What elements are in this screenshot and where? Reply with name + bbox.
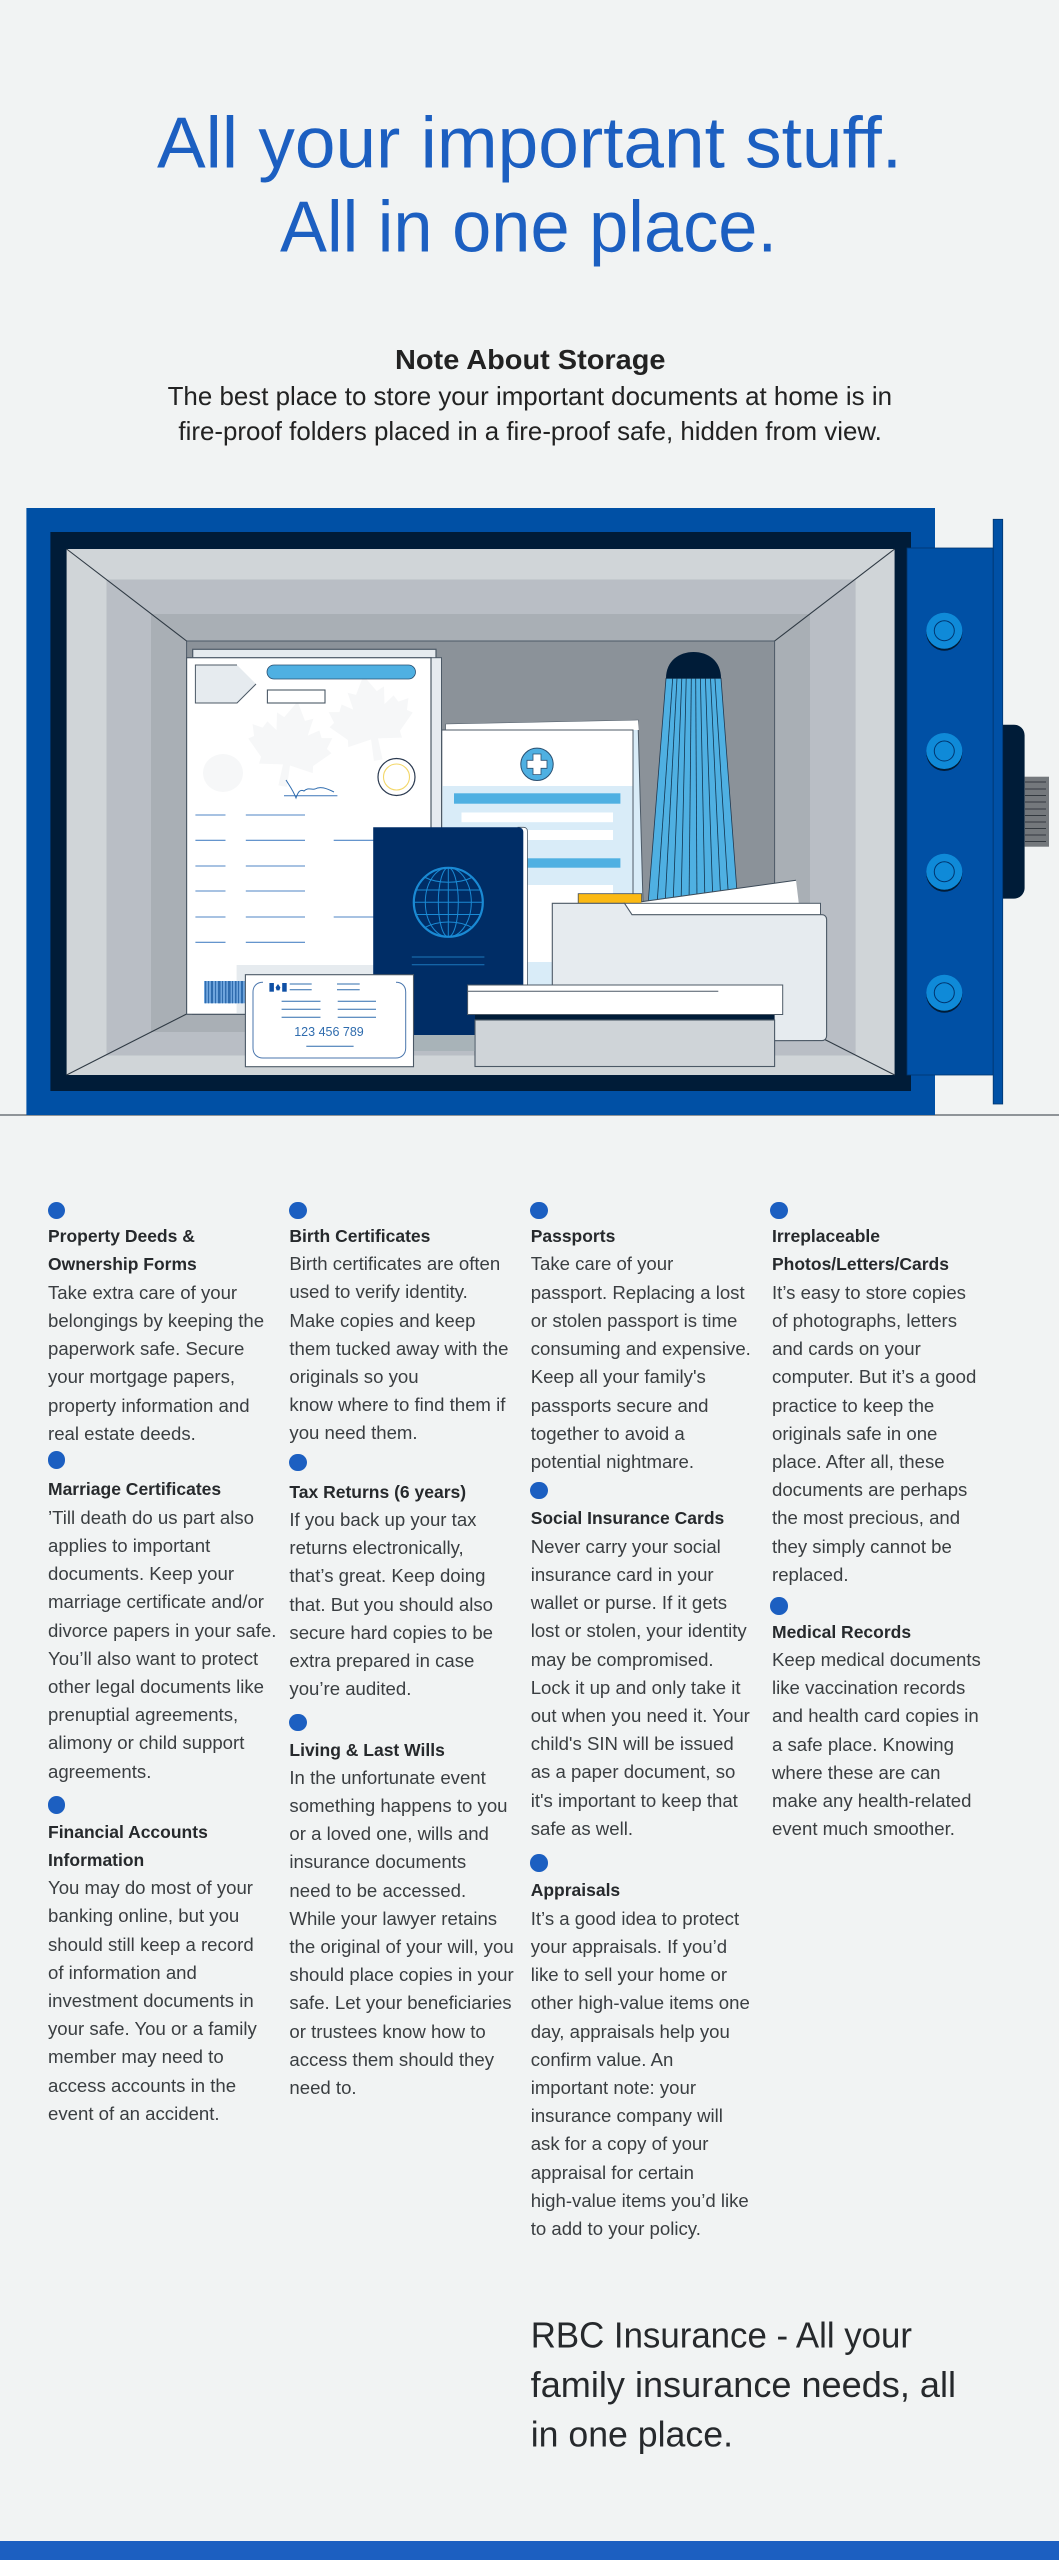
passport — [373, 827, 527, 1035]
body text: If you back up your tax — [289, 1509, 476, 1530]
body text: Take care of your — [531, 1253, 673, 1274]
body text: Take extra care of your — [48, 1282, 237, 1303]
panel: birth certificates — [289, 1202, 508, 1443]
body text: used to verify identity. — [289, 1281, 468, 1302]
document lines — [195, 815, 374, 942]
body text: them tucked away with the — [289, 1338, 508, 1359]
safe illustration — [0, 508, 1059, 1116]
body text: investment documents in — [48, 1990, 254, 2011]
body text: belongings by keeping the — [48, 1310, 264, 1331]
body text: practice to keep the — [772, 1394, 934, 1416]
body text: that. But you should also — [289, 1594, 493, 1615]
body text: safe. Let your beneficiaries — [289, 1992, 512, 2013]
heading — [48, 1822, 208, 1870]
bullet — [48, 1796, 65, 1814]
heading: Irreplaceable — [772, 1226, 880, 1246]
body text: your appraisals. If you’d — [531, 1936, 727, 1957]
closing statement: RBC Insurance - All your — [531, 2315, 912, 2356]
rolled document — [648, 652, 738, 905]
body text: Never carry your social — [531, 1536, 721, 1557]
body text: where these are can — [772, 1762, 940, 1783]
body text: should still keep a record — [48, 1934, 254, 1955]
storage note — [168, 344, 892, 446]
heading: Living & Last Wills — [289, 1740, 445, 1760]
body text: passport. Replacing a lost — [531, 1282, 745, 1303]
body text: member may need to — [48, 2046, 224, 2067]
barcode — [204, 981, 245, 1003]
body text — [531, 1253, 751, 1472]
body text: that’s great. Keep doing — [289, 1565, 485, 1586]
body text: lost or stolen, your identity — [531, 1620, 747, 1641]
title: All in one place. — [280, 188, 777, 268]
panel: social insurance cards — [530, 1482, 750, 1839]
body text: your safe. You or a family — [48, 2018, 257, 2039]
body text: together to avoid a — [531, 1423, 685, 1444]
body text: Birth certificates are often — [289, 1253, 500, 1274]
body text: originals so you — [289, 1366, 419, 1387]
title — [157, 103, 902, 268]
title bar — [267, 665, 416, 679]
body text — [48, 1507, 276, 1782]
heading: Information — [48, 1850, 144, 1870]
body text: consuming and expensive. — [531, 1338, 751, 1359]
bullet — [770, 1597, 788, 1615]
body text: property information and — [48, 1394, 250, 1416]
heading: Social Insurance Cards — [531, 1508, 724, 1528]
heading: Ownership Forms — [48, 1254, 197, 1274]
bullet — [530, 1202, 548, 1219]
medical document — [442, 720, 643, 985]
body text — [530, 1536, 750, 1839]
body text: and health card copies in — [772, 1705, 979, 1726]
heading — [48, 1226, 197, 1274]
panel: appraisals — [530, 1854, 750, 2239]
body text: documents are perhaps — [772, 1479, 967, 1500]
panel: marriage certificates — [48, 1451, 276, 1782]
safe interior — [67, 549, 895, 1075]
body text — [289, 1767, 514, 2098]
note text: The best place to store your important documents at home is in — [168, 381, 892, 411]
note text: fire-proof folders placed in a fire-proof safe, hidden from view. — [178, 416, 882, 446]
body text: event much smoother. — [772, 1818, 955, 1839]
globe emblem — [414, 868, 483, 937]
bullet — [770, 1202, 788, 1219]
body text: divorce papers in your safe. — [48, 1620, 276, 1640]
body text: place. After all, these — [772, 1451, 945, 1472]
note heading: Note About Storage — [395, 344, 666, 375]
body text: as a paper document, so — [531, 1761, 735, 1782]
body text: it's important to keep that — [531, 1790, 738, 1811]
body text: extra prepared in case — [289, 1650, 474, 1671]
body text: event of an accident. — [48, 2103, 220, 2124]
panel: passports — [530, 1202, 751, 1472]
body text: need to be accessed. — [289, 1880, 466, 1901]
body text: make any health-related — [772, 1790, 971, 1811]
icon: canadian flag — [269, 983, 287, 992]
body text: high-value items you’d like — [531, 2190, 749, 2211]
body text: prenuptial agreements, — [48, 1704, 238, 1725]
signature — [284, 795, 337, 797]
closing statement: in one place. — [531, 2414, 733, 2455]
door bolts — [926, 613, 962, 1013]
body text: know where to find them if — [289, 1394, 505, 1415]
body text — [530, 1908, 750, 2239]
body text: secure hard copies to be — [289, 1622, 493, 1643]
bullet — [530, 1482, 548, 1499]
panel: medical records — [770, 1597, 981, 1839]
watermark maple leaves — [203, 668, 420, 793]
body text — [289, 1509, 493, 1699]
bullet — [48, 1451, 65, 1469]
body text: important note: your — [531, 2077, 696, 2098]
body text: applies to important — [48, 1535, 210, 1556]
body text: agreements. — [48, 1761, 151, 1782]
heading: Property Deeds & — [48, 1226, 195, 1246]
body text: ask for a copy of your — [531, 2133, 708, 2154]
body text: marriage certificate and/or — [48, 1591, 264, 1612]
body text: You may do most of your — [48, 1877, 253, 1898]
body text: other legal documents like — [48, 1676, 264, 1697]
heading: Passports — [531, 1226, 615, 1246]
heading: Tax Returns (6 years) — [289, 1482, 466, 1502]
body text: insurance company will — [531, 2105, 723, 2126]
bullet — [289, 1202, 307, 1219]
body text: Keep medical documents — [772, 1649, 981, 1670]
body text: need to. — [289, 2077, 357, 2098]
safe door — [895, 519, 1049, 1104]
body text: insurance card in your — [531, 1564, 714, 1585]
body text: It’s a good idea to protect — [531, 1908, 739, 1929]
body text: and cards on your — [772, 1338, 921, 1359]
seal — [378, 758, 415, 796]
heading: Birth Certificates — [289, 1226, 430, 1246]
body text: real estate deeds. — [48, 1423, 196, 1444]
body text: passports secure and — [531, 1394, 708, 1416]
body text: originals safe in one — [772, 1423, 937, 1444]
body text: In the unfortunate event — [289, 1767, 486, 1788]
body text: insurance documents — [289, 1851, 466, 1872]
panel: financial accounts — [48, 1796, 257, 2124]
bullet — [530, 1854, 548, 1872]
bullet — [289, 1714, 307, 1731]
body text: You’ll also want to protect — [48, 1648, 258, 1669]
body text: Lock it up and only take it — [531, 1677, 741, 1698]
heading: Financial Accounts — [48, 1822, 208, 1842]
body text: wallet or purse. If it gets — [531, 1592, 727, 1613]
body text: documents. Keep your — [48, 1563, 234, 1584]
body text: should place copies in your — [289, 1964, 514, 1985]
body text: day, appraisals help you — [531, 2020, 730, 2042]
body text — [48, 1282, 264, 1444]
panel: irreplaceable items — [770, 1202, 976, 1585]
body text: access accounts in the — [48, 2075, 236, 2096]
body text: you’re audited. — [289, 1678, 411, 1699]
card number: 123 456 789 — [294, 1025, 364, 1039]
closing statement: family insurance needs, all — [531, 2364, 956, 2405]
body text: or a loved one, wills and — [289, 1823, 489, 1844]
heading: Marriage Certificates — [48, 1479, 221, 1499]
bullet — [48, 1202, 65, 1219]
body text: you need them. — [289, 1422, 418, 1443]
body text — [772, 1649, 981, 1839]
body text — [289, 1253, 508, 1443]
body text: It’s easy to store copies — [772, 1282, 966, 1303]
door handle — [1000, 725, 1049, 899]
body text: a safe place. Knowing — [772, 1734, 954, 1755]
body text: ’Till death do us part also — [48, 1507, 254, 1528]
body text: appraisal for certain — [531, 2162, 694, 2183]
body text: alimony or child support — [48, 1732, 244, 1753]
panel: property deeds — [48, 1202, 264, 1444]
body text: or trustees know how to — [289, 2021, 486, 2042]
panel: living and last wills — [289, 1714, 514, 2098]
heading: Photos/Letters/Cards — [772, 1254, 949, 1274]
body text: banking online, but you — [48, 1905, 239, 1926]
title: All your important stuff. — [157, 103, 902, 183]
panel: tax returns — [289, 1454, 493, 1699]
note text — [168, 381, 892, 446]
body text: safe as well. — [531, 1818, 633, 1839]
body text: Keep all your family's — [531, 1366, 706, 1387]
social insurance card — [245, 975, 414, 1067]
body text: they simply cannot be — [772, 1536, 952, 1557]
body text: out when you need it. Your — [531, 1705, 750, 1726]
body text: your mortgage papers, — [48, 1366, 235, 1387]
stacked box — [414, 985, 783, 1066]
file folder — [552, 880, 827, 1041]
body text: While your lawyer retains — [289, 1908, 497, 1929]
body text: of photographs, letters — [772, 1310, 957, 1331]
body text: child's SIN will be issued — [531, 1733, 734, 1754]
footer bar — [0, 2540, 1059, 2560]
body text: returns electronically, — [289, 1537, 464, 1558]
body text: Make copies and keep — [289, 1310, 475, 1330]
body text: confirm value. An — [531, 2049, 673, 2070]
heading: Medical Records — [772, 1622, 911, 1642]
safe frame — [0, 508, 1059, 1115]
heading — [772, 1226, 949, 1274]
body text: replaced. — [772, 1564, 848, 1585]
body text: the most precious, and — [772, 1507, 960, 1528]
closing statement — [531, 2315, 956, 2455]
body text: or stolen passport is time — [531, 1310, 737, 1331]
body text: access them should they — [289, 2049, 494, 2070]
body text: to add to your policy. — [531, 2218, 701, 2239]
body text: of information and — [48, 1962, 197, 1983]
body text — [772, 1282, 976, 1585]
certificate document — [187, 649, 442, 1014]
heading: Appraisals — [531, 1880, 620, 1900]
bullet — [289, 1454, 307, 1471]
body text: potential nightmare. — [531, 1451, 694, 1472]
body text: computer. But it’s a good — [772, 1366, 976, 1387]
body text: like vaccination records — [772, 1677, 965, 1698]
body text — [48, 1877, 257, 2124]
body text: something happens to you — [289, 1795, 508, 1816]
body text: the original of your will, you — [289, 1936, 514, 1957]
body text: may be compromised. — [531, 1648, 714, 1670]
body text: other high-value items one — [531, 1992, 750, 2013]
document tag — [195, 665, 256, 703]
body text: like to sell your home or — [531, 1964, 727, 1985]
icon: medical cross — [521, 748, 553, 780]
body text: paperwork safe. Secure — [48, 1338, 244, 1359]
